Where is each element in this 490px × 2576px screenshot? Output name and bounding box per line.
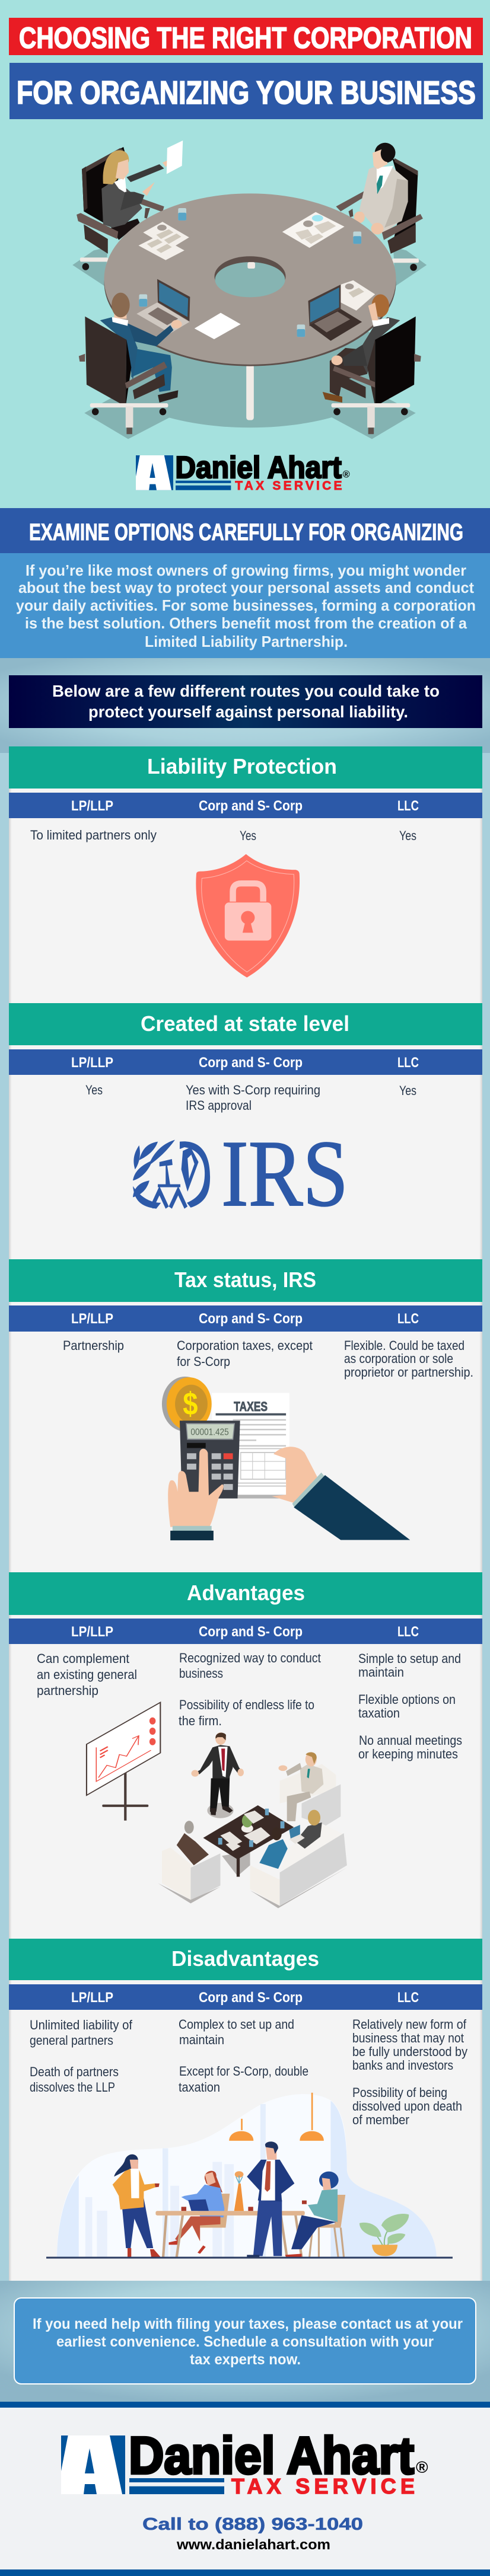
column text: an existing general <box>37 1667 137 1682</box>
column text: Unlimited liability of <box>30 2018 133 2032</box>
laptops <box>136 279 362 341</box>
logo: Daniel Ahart Tax Service, hero <box>136 450 350 493</box>
column text: Corporation taxes, except <box>177 1338 313 1353</box>
man in chair, front right <box>323 294 421 434</box>
column text: Yes <box>85 1083 103 1097</box>
icon: IRS eagle emblem <box>133 1139 210 1209</box>
column text: To limited partners only <box>30 828 157 842</box>
column text: Partnership <box>63 1338 124 1353</box>
heading: disadvantages <box>9 1939 482 1980</box>
column text: taxation <box>358 1706 400 1720</box>
column text: maintain <box>358 1665 404 1680</box>
tax form: TAXES <box>234 1400 268 1414</box>
logo: Daniel Ahart Tax Service, footer: ® <box>416 2458 428 2476</box>
room backdrop <box>57 2094 437 2257</box>
hero background <box>0 0 490 508</box>
column text: banks and investors <box>352 2058 453 2073</box>
column headers <box>9 793 482 818</box>
column text <box>30 2017 467 2127</box>
column headers: LLC <box>397 1055 419 1071</box>
column text: Recognized way to conduct <box>179 1651 321 1665</box>
icon: shield with padlock <box>196 854 300 978</box>
seated person on left armchair <box>158 1821 220 1904</box>
illustration: office meeting <box>158 1732 347 1908</box>
heading: disadvantages: Disadvantages <box>171 1946 319 1971</box>
section heading: examine options <box>0 508 490 553</box>
column headers: LLC <box>397 1311 419 1327</box>
column text: Possibility of endless life to <box>179 1697 314 1712</box>
intro paragraph: If you’re like most owners of growing firms, you might wonder <box>26 561 466 579</box>
column text: or keeping minutes <box>358 1747 458 1761</box>
illustration: presentation board <box>87 1702 160 1821</box>
footer <box>0 2402 490 2576</box>
callout: contact: earliest convenience. Schedule a consultation with your <box>56 2334 434 2350</box>
floor line <box>46 2256 453 2259</box>
website: www.danielahart.com <box>176 2537 330 2553</box>
column text: Yes <box>399 828 416 843</box>
column text: Relatively new form of <box>352 2017 467 2032</box>
column text: for S-Corp <box>177 1354 230 1369</box>
panel: created at state level <box>9 1003 482 1259</box>
column text: partnership <box>37 1683 98 1698</box>
column headers: LP/LLP <box>71 1311 113 1327</box>
calculator <box>180 1421 240 1499</box>
potted plant <box>359 2214 409 2256</box>
right hand and sleeve <box>272 1447 410 1540</box>
coffee table <box>203 1805 294 1877</box>
left hand <box>168 1449 224 1540</box>
column text <box>85 1083 416 1113</box>
panel: disadvantages <box>9 1939 482 2281</box>
coin <box>162 1377 212 1431</box>
logo: IRS <box>133 1121 348 1226</box>
column text <box>30 828 416 843</box>
coin: $ <box>183 1386 198 1422</box>
column text: Yes <box>399 1083 416 1098</box>
column headers <box>9 1049 482 1075</box>
table with vase and cups <box>155 2171 305 2257</box>
pendant lamps <box>229 2093 324 2141</box>
column text <box>63 1338 473 1380</box>
panel: advantages <box>9 1572 482 1939</box>
column text: be fully understood by <box>352 2044 467 2059</box>
heading: tax status: Tax status, IRS <box>174 1268 316 1292</box>
column text: business <box>179 1666 223 1681</box>
column headers <box>9 1305 482 1332</box>
column text: Possibility of being <box>352 2085 447 2100</box>
logo: Daniel Ahart Tax Service, footer: TAX SERVICE <box>231 2474 415 2498</box>
column text: Flexible options on <box>358 1692 456 1707</box>
logo: Daniel Ahart Tax Service, footer <box>61 2426 428 2498</box>
column headers <box>9 1619 482 1644</box>
woman in chair, back left <box>77 141 183 270</box>
column headers: Corp and S- Corp <box>199 1624 303 1640</box>
logo: Daniel Ahart Tax Service, footer: Daniel Ahart <box>129 2426 414 2485</box>
standing woman <box>113 2154 161 2257</box>
heading: liability protection <box>9 746 482 789</box>
column text: dissolves the LLP <box>30 2080 115 2095</box>
table top with hole <box>104 193 396 366</box>
intro paragraph: is the best solution. Others benefit most from the creation of a <box>25 614 467 632</box>
column text: Except for S-Corp, double <box>179 2064 308 2079</box>
column headers: LLC <box>397 1990 419 2006</box>
floor shadows <box>72 247 427 439</box>
panel: liability protection <box>9 746 482 1003</box>
heading: tax status <box>9 1259 482 1302</box>
intro paragraph: Limited Liability Partnership. <box>145 633 348 650</box>
table leg <box>246 364 254 420</box>
column text: taxation <box>179 2080 220 2095</box>
man in chair, front left <box>79 293 182 434</box>
seated people on sofa <box>250 1810 347 1908</box>
column headers: LP/LLP <box>71 1055 113 1071</box>
standing man <box>247 2141 294 2258</box>
column text: Yes with S-Corp requiring <box>186 1083 320 1097</box>
column text: No annual meetings <box>359 1733 462 1748</box>
callout: contact <box>14 2298 476 2384</box>
man in chair, back right <box>336 143 423 271</box>
intro paragraph <box>0 553 490 658</box>
panel: tax status <box>9 1259 482 1572</box>
column headers: LP/LLP <box>71 1990 113 2006</box>
column headers: Corp and S- Corp <box>199 1311 303 1327</box>
column text: general partners <box>30 2033 113 2048</box>
heading: advantages: Advantages <box>187 1581 305 1605</box>
heading: advantages <box>9 1572 482 1615</box>
column text: Complex to set up and <box>179 2017 294 2032</box>
column headers: LLC <box>397 798 419 814</box>
standing man <box>191 1732 244 1818</box>
heading: created at state level <box>9 1003 482 1045</box>
column text: maintain <box>179 2032 224 2047</box>
title line 2 <box>9 63 483 119</box>
column headers: Corp and S- Corp <box>199 1055 303 1071</box>
column headers: Corp and S- Corp <box>199 798 303 814</box>
water glasses <box>139 208 361 337</box>
callout: routes: Below are a few different routes you could take to <box>52 682 440 700</box>
heading: liability protection: Liability Protection <box>147 754 337 778</box>
column text: the firm. <box>179 1713 222 1728</box>
callout: contact: If you need help with filing your taxes, please contact us at your <box>33 2316 463 2332</box>
column headers: LP/LLP <box>71 1624 113 1640</box>
column text: dissolved upon death <box>352 2099 462 2114</box>
phone number: Call to (888) 963-1040 <box>142 2515 363 2534</box>
documents on table <box>138 212 375 339</box>
logo: Daniel Ahart Tax Service, hero: ® <box>343 469 350 480</box>
column text: Can complement <box>37 1651 129 1666</box>
column text: proprietor or partnership. <box>344 1365 473 1380</box>
seated woman with laptop <box>169 2171 230 2254</box>
lower background <box>0 658 490 2402</box>
seated man on right sofa <box>278 1752 341 1826</box>
column text: Simple to setup and <box>358 1651 461 1666</box>
callout: routes: protect yourself against personal liability. <box>88 703 408 721</box>
column headers: LP/LLP <box>71 798 113 814</box>
intro paragraph: about the best way to protect your personal assets and conduct <box>18 579 474 596</box>
heading: created at state level: Created at state level <box>141 1011 349 1036</box>
column text: as corporation or sole <box>344 1351 453 1366</box>
logo: Daniel Ahart Tax Service, hero: Daniel Ahart <box>175 450 342 484</box>
column text: business that may not <box>352 2031 464 2045</box>
column text: Yes <box>240 828 256 843</box>
column text: of member <box>352 2112 409 2127</box>
column text: IRS approval <box>186 1098 252 1113</box>
column headers <box>9 1984 482 2010</box>
illustration: calculator and tax form <box>162 1377 410 1540</box>
illustration: round table meeting <box>72 141 427 439</box>
column headers: Corp and S- Corp <box>199 1990 303 2006</box>
column text: Flexible. Could be taxed <box>344 1338 464 1353</box>
logo: IRS: IRS <box>221 1121 348 1226</box>
calculator: 00001.425 <box>190 1428 229 1438</box>
callout: contact: tax experts now. <box>190 2351 301 2368</box>
callout: routes <box>9 675 482 728</box>
logo: Daniel Ahart Tax Service, hero: TAX SERVICE <box>235 479 342 493</box>
seated woman right <box>285 2172 345 2257</box>
tax form <box>212 1393 289 1499</box>
column text <box>37 1651 462 1761</box>
illustration: team in office <box>46 2093 453 2259</box>
column text: Death of partners <box>30 2064 119 2079</box>
column headers: LLC <box>397 1624 419 1640</box>
intro paragraph: your daily activities. For some businesses, forming a corporation <box>16 596 476 614</box>
